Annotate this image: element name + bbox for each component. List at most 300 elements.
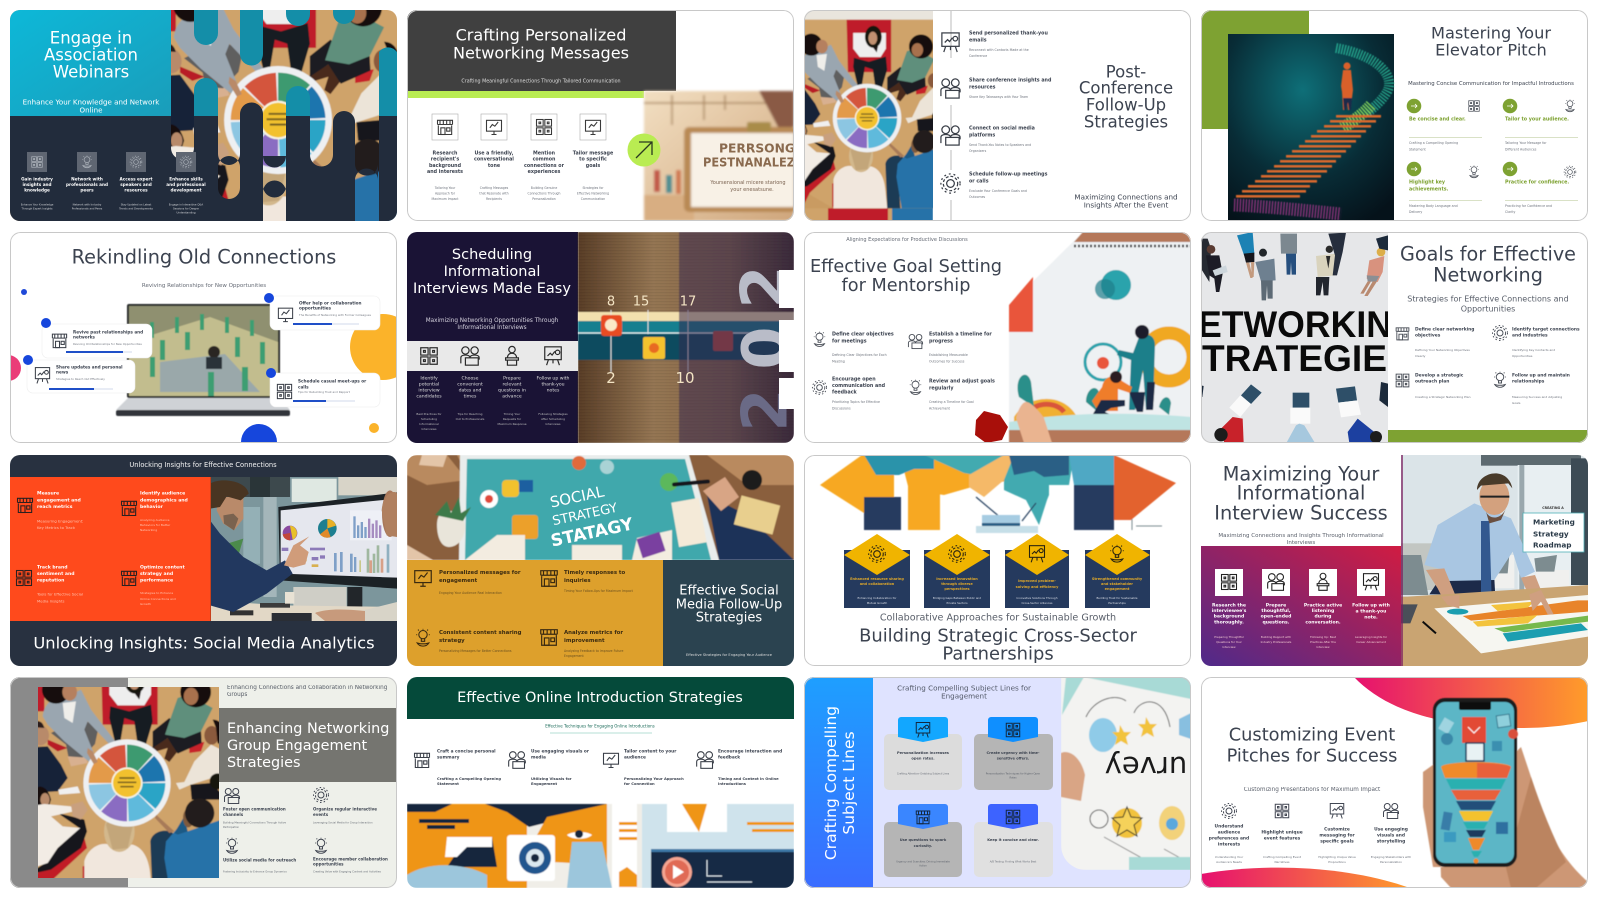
- item captions: Personalizing Your Approach: [624, 777, 684, 781]
- title: [676, 584, 782, 626]
- card: curiosity: Action: [919, 864, 927, 868]
- callout: offer: [264, 293, 380, 330]
- title: [859, 626, 1138, 664]
- timeline numbers: [606, 294, 696, 387]
- slide: Crafting Compelling Subject Lines: [804, 677, 1191, 888]
- callout: schedule: Schedule casual meet-ups or: [298, 378, 367, 384]
- chevron card 4: [1085, 534, 1150, 608]
- white edge blocks: [779, 270, 794, 409]
- item labels: during: [1315, 614, 1331, 620]
- amber panel: [407, 560, 663, 666]
- item labels: messaging for: [1319, 832, 1355, 838]
- item captions: Utilizing Visuals for: [531, 777, 572, 781]
- photo: analyst at monitor: [210, 477, 398, 621]
- title: Networking: [1433, 264, 1543, 286]
- item captions: Goals: [1512, 401, 1521, 405]
- item captions: Creating a Timeline for Goal: [929, 400, 974, 404]
- top caption: [227, 685, 388, 698]
- item labels: summary: [437, 754, 460, 760]
- item labels: Personalized messages for: [439, 570, 521, 576]
- slide: Crafting Personalized Networking Messages: your enesatsune.: [730, 187, 774, 193]
- title: Effective Online Introduction Strategies: [457, 690, 743, 706]
- item labels: advance: [502, 394, 522, 400]
- item captions: Approach for: [435, 192, 456, 196]
- item captions: Strategies for: [582, 186, 604, 190]
- chevron card 1: Enhancing Collaboration for: [858, 596, 897, 600]
- title: [1400, 242, 1576, 286]
- item labels: speakers and: [120, 182, 152, 187]
- title: Interview Success: [1214, 502, 1388, 524]
- item captions: Trends and Developments: [119, 206, 154, 210]
- item captions: [439, 589, 634, 658]
- item labels: Network with: [71, 176, 103, 182]
- item captions: Identifying Key Contacts and: [1512, 348, 1555, 352]
- item captions: [432, 186, 609, 201]
- subtitle: [426, 318, 559, 331]
- item labels: thoroughly.: [1214, 620, 1244, 626]
- item labels: Establish a timeline for: [929, 332, 992, 338]
- photo: desk sign: [644, 91, 796, 221]
- top caption: Groups: [227, 692, 247, 698]
- item labels: reputation: [37, 578, 64, 584]
- item captions: Understanding Your: [1215, 855, 1244, 859]
- item captions: Career Advancement: [1356, 640, 1387, 644]
- subtitle: Insights After the Event: [1084, 200, 1168, 210]
- item labels: interviewee's: [1212, 608, 1247, 614]
- item captions: Interview: [1316, 645, 1330, 649]
- item captions: Engaging Your Audience Real Interaction: [439, 591, 502, 595]
- photo: social strategy tablet on desk: [407, 455, 794, 560]
- item labels: feedback: [718, 754, 740, 760]
- item labels: Gain industry: [21, 176, 53, 182]
- icons: [16, 498, 136, 586]
- grey side band: [10, 677, 128, 888]
- item captions: Online Connections and: [140, 597, 176, 601]
- item icons: [415, 571, 557, 646]
- item captions: Building Rapport with: [1261, 635, 1291, 639]
- title: Maximizing Your: [1223, 462, 1379, 486]
- item labels: development: [171, 188, 201, 192]
- item captions: [21, 202, 203, 214]
- card: concise: [974, 804, 1053, 877]
- title: [453, 26, 629, 62]
- item captions: [1215, 855, 1411, 864]
- title: Effective Social: [679, 584, 779, 598]
- item captions: Narratives: [1275, 860, 1290, 864]
- item captions: Building Meaningful Connections Through Active: [223, 820, 286, 824]
- item labels: performance: [140, 578, 173, 584]
- title: Rekindling Old Connections: [72, 246, 336, 268]
- item captions: Growth: [140, 602, 151, 606]
- chevron card 3: [1005, 534, 1069, 608]
- item labels: [1415, 326, 1580, 384]
- item labels: interests: [1218, 842, 1240, 848]
- subtitle: Crafting Meaningful Connections Through Tailored Communication: [461, 78, 621, 84]
- item captions: Leveraging Insights for: [1355, 635, 1388, 639]
- chevron card 2: perspectives: [944, 587, 970, 591]
- item labels: communication and: [832, 383, 886, 389]
- gradient swoosh top: [1354, 677, 1588, 728]
- item labels: Prepare: [503, 376, 521, 382]
- card: curiosity: Use questions to spark: [900, 838, 947, 842]
- item labels: conversational: [474, 156, 514, 162]
- item captions: Best Practices for: [416, 412, 442, 416]
- timeline text: platforms: [969, 132, 995, 138]
- icon strip: [407, 341, 578, 371]
- item labels: professionals and: [66, 182, 108, 187]
- item labels: feedback: [832, 390, 858, 396]
- item labels: progress: [929, 338, 953, 344]
- item captions: Crafting Compelling Event: [1263, 855, 1302, 859]
- social strategy words: [548, 482, 636, 551]
- item labels: for meetings: [832, 338, 867, 344]
- timeline text: emails: [969, 38, 987, 44]
- item labels: outreach plan: [1415, 378, 1449, 384]
- item labels: Follow up with: [1352, 602, 1390, 608]
- title panel: Group Engagement: [227, 738, 368, 754]
- timeline captions: Conference: [969, 54, 987, 58]
- subtitle: Maximizing Connections and: [1074, 192, 1178, 202]
- item icons: [812, 332, 923, 395]
- item captions: Mastering Body Language and: [1409, 204, 1458, 208]
- chevron card 3: solving and efficiency: [1016, 585, 1059, 589]
- chevron card 2: [924, 534, 990, 608]
- chevron card 2: Increased innovation: [936, 577, 978, 581]
- item labels: inquiries: [564, 578, 591, 584]
- item captions: Timing Your Follow-Ups for Maximum Impact: [563, 589, 634, 593]
- item labels: Follow up with: [537, 376, 570, 382]
- photo: survey sheet: urvey: [1105, 750, 1187, 784]
- slide: Unlocking Insights Social Media Analytics: [10, 455, 397, 666]
- item captions: Maximum Response: [497, 422, 527, 426]
- item labels: opportunities: [313, 862, 344, 866]
- item captions: [416, 412, 568, 431]
- slide: Scheduling Informational Interviews Made Easy: [407, 232, 794, 443]
- item captions: Connections Through: [528, 192, 561, 196]
- timeline text: Connect on social media: [969, 126, 1035, 132]
- item captions: Measuring Engagement:: [37, 518, 83, 524]
- card: open rates: [884, 717, 962, 790]
- item labels: reach metrics: [37, 504, 73, 510]
- item captions: Enhance Your Knowledge: [21, 202, 54, 206]
- item labels: [1212, 602, 1390, 626]
- title: Follow-Up: [1086, 96, 1166, 114]
- chevron card 4: Partnerships: [1108, 601, 1126, 605]
- item labels: audience: [1218, 830, 1240, 836]
- callout: offer: opportunities: [299, 306, 331, 310]
- item labels: [223, 806, 388, 866]
- timeline captions: Outcomes: [969, 195, 986, 199]
- timeline numbers: 2: [606, 369, 616, 387]
- card: urgency: Personalization Techniques for Higher Open: [986, 772, 1041, 776]
- slide: Goals for Effective Networking: [1201, 232, 1588, 443]
- item captions: Introductions: [718, 782, 747, 786]
- item labels: Define clear networking: [1415, 326, 1474, 332]
- item labels: common: [533, 158, 556, 162]
- social strategy words: SOCIAL: [548, 482, 606, 512]
- item labels: interview: [418, 388, 440, 394]
- item captions: Practices After the: [1310, 640, 1336, 644]
- item captions: Prioritizing Topics for Effective: [832, 400, 880, 404]
- item captions: Participation: [223, 825, 240, 829]
- sign: marketing roadmap: CREATING A: [1542, 506, 1564, 510]
- subtitle: [897, 684, 1031, 700]
- item captions: Meeting: [832, 360, 845, 364]
- subtitle: Interviews: [1287, 540, 1315, 546]
- card: curiosity: [884, 804, 962, 877]
- item labels: Mention: [533, 150, 556, 156]
- item labels: to specific: [579, 156, 607, 162]
- item labels: Highlight unique: [1261, 830, 1303, 836]
- item captions: Personalizing Messages for Better Connections: [439, 649, 512, 653]
- item captions: Crafting a Compelling Opening: [1409, 141, 1458, 145]
- timeline numbers: 17: [680, 294, 696, 310]
- card: concise: A/B Testing: Finding What Works Best: [990, 860, 1036, 864]
- item labels: Timely responses to: [564, 570, 625, 576]
- title: Scheduling: [452, 247, 532, 263]
- chevron card 4: and stakeholder: [1101, 582, 1133, 586]
- green block: [1201, 10, 1309, 129]
- vertical title: [822, 706, 858, 860]
- navy text panel: [407, 232, 578, 443]
- title: Pitches for Success: [1227, 746, 1397, 766]
- item captions: Analyzing Feedback to Improve Future: [564, 649, 624, 653]
- item captions: Statement: [437, 782, 459, 786]
- slide: Effective Social Media Follow-Up Strategies: [407, 455, 794, 666]
- title: Mastering Your: [1431, 24, 1551, 42]
- timeline numbers: 8: [607, 294, 615, 310]
- item labels: Research the: [1212, 602, 1246, 608]
- subtitle: Crafting Compelling Subject Lines for: [897, 684, 1031, 692]
- item captions: Understanding: [176, 210, 196, 214]
- timeline captions: Organizers: [969, 149, 987, 153]
- item labels: thoughtful,: [1261, 608, 1291, 614]
- big words in photo: TRATEGIE: [1202, 338, 1387, 379]
- top caption: Enhancing Connections and Collaboration in Networking: [227, 685, 388, 691]
- item labels: Be concise and clear.: [1409, 116, 1466, 122]
- image: hand holding phone: [1423, 698, 1588, 888]
- item captions: Networking: [140, 528, 157, 532]
- timeline text: [969, 30, 1052, 184]
- item labels: preferences and: [1209, 836, 1249, 842]
- item labels: [437, 748, 782, 760]
- item captions: Defining Your Networking Objectives: [1415, 348, 1470, 352]
- item captions: Stay Updated on Latest: [121, 202, 151, 206]
- callout: schedule: calls: [298, 384, 309, 390]
- title: Engage in: [50, 28, 132, 48]
- card: urgency: [974, 717, 1053, 790]
- timeline icons: [941, 33, 960, 193]
- top caption: Aligning Expectations for Productive Discussions: [846, 237, 968, 243]
- icon tiles: [1215, 569, 1385, 596]
- subtitle: Reviving Relationships for New Opportunities: [142, 283, 266, 289]
- title: Strategies: [1084, 112, 1168, 132]
- item captions: Timing and Context in Online: [718, 777, 779, 781]
- item labels: specific goals: [1320, 838, 1354, 844]
- timeline text: resources: [969, 84, 996, 90]
- item icons: [1222, 804, 1398, 818]
- item labels: convenient: [457, 382, 483, 388]
- subtitle: [23, 98, 160, 114]
- sign: marketing roadmap: Roadmap: [1533, 540, 1572, 550]
- item captions: Interview: [1222, 645, 1236, 649]
- item labels: Encourage open: [832, 376, 876, 382]
- title: Strategies: [696, 610, 762, 626]
- item captions: Strategies to Enhance: [140, 591, 173, 595]
- title: Goals for Effective: [1400, 242, 1576, 266]
- item labels: Tailor message: [573, 150, 614, 156]
- item captions: Different Audiences: [1505, 148, 1537, 152]
- item labels: [416, 376, 570, 400]
- gradient swoosh bottom: [1201, 868, 1410, 888]
- subtitle: Strategies for Effective Connections and: [1407, 294, 1569, 304]
- illustration: handshake arrows: [820, 455, 1176, 533]
- item labels: improvement: [564, 638, 605, 644]
- timeline captions: Reconnect with Contacts Made at the: [969, 48, 1029, 52]
- item captions: [437, 777, 779, 786]
- lime accent bar: [407, 91, 644, 98]
- orange panel: [10, 477, 210, 621]
- subtitle: Maximizing Connections and Insights Through Informational: [1218, 533, 1384, 539]
- item captions: Analyzing Audience: [140, 518, 170, 522]
- title: Crafting Personalized: [456, 26, 626, 44]
- item labels: Access expert: [120, 176, 152, 182]
- title: Association: [44, 46, 138, 64]
- chevron card 3: Innovative Solutions Through: [1017, 596, 1058, 600]
- item labels: Prepare: [1266, 602, 1286, 608]
- timeline image: [578, 232, 794, 443]
- item labels: listening: [1312, 608, 1334, 614]
- sign text: PERRSONG: [719, 140, 794, 156]
- item labels: Foster open communication: [223, 806, 286, 812]
- gradient panel: [1201, 546, 1401, 666]
- item labels: Highlight key: [1409, 180, 1446, 186]
- item labels: behavior: [140, 504, 163, 510]
- item captions: [36, 518, 176, 606]
- item labels: Encourage member collaboration: [313, 856, 388, 862]
- item labels: engagement and: [37, 498, 81, 504]
- item captions: Establishing Measurable: [929, 353, 968, 357]
- icon row: [27, 152, 196, 172]
- item labels: Utilize social media for outreach: [223, 858, 296, 862]
- item labels: resources: [124, 188, 148, 192]
- item captions: Building Genuine: [531, 186, 557, 190]
- item labels: dates and: [459, 388, 482, 394]
- item labels: strategy: [439, 638, 465, 644]
- timeline text: or calls: [969, 178, 989, 184]
- illustration: woman with camera and video screen: [407, 804, 794, 888]
- photo: group around wheel: [804, 10, 933, 221]
- item captions: Personalization: [1380, 860, 1402, 864]
- item labels: questions in: [498, 388, 526, 394]
- item labels: [439, 570, 625, 644]
- item captions: Clarity: [1505, 210, 1516, 214]
- item captions: Through Expert Insights: [21, 206, 53, 210]
- item labels: [832, 332, 995, 396]
- sign: marketing roadmap: Strategy: [1533, 530, 1569, 538]
- title: Partnerships: [942, 644, 1054, 664]
- title: for Mentorship: [842, 276, 970, 296]
- item captions: Effective Networking: [577, 192, 609, 196]
- card: open rates: open rates.: [911, 756, 935, 760]
- item captions: Requests for: [503, 417, 522, 421]
- large rotated year: [728, 265, 802, 432]
- item captions: Defining Clear Objectives for Each: [832, 353, 887, 357]
- title: Networking Messages: [453, 44, 629, 62]
- title: [1214, 462, 1388, 524]
- callout: revive: [41, 318, 152, 358]
- subtitle: Enhance Your Knowledge and Network: [23, 98, 160, 106]
- item labels: connections or: [524, 163, 565, 169]
- bottom title: Unlocking Insights: Social Media Analytics: [33, 634, 375, 652]
- slate title panel: [663, 560, 794, 666]
- dividers: [1409, 138, 1578, 200]
- callout: share: Share updates and personal: [56, 364, 123, 370]
- title: Webinars: [53, 62, 129, 82]
- subtitle: Informational Interviews: [457, 325, 527, 331]
- social strategy words: STATAGY: [549, 514, 636, 551]
- item labels: Identify: [420, 376, 438, 382]
- card: curiosity: curiosity.: [914, 844, 932, 848]
- blue side band: [804, 677, 873, 888]
- item labels: note.: [1364, 614, 1378, 620]
- item captions: Engaging Stakeholders with: [1371, 855, 1411, 859]
- item captions: Professionals and Peers: [72, 206, 103, 210]
- item labels: relationships: [1512, 378, 1545, 384]
- timeline captions: Send Thank-You Notes to Speakers and: [969, 143, 1031, 147]
- title: [1227, 724, 1397, 766]
- item captions: Creating Value with Engaging Content and Activities: [313, 870, 381, 874]
- item labels: Optimize content: [140, 564, 185, 570]
- chevron card 1: Mutual Growth: [867, 601, 888, 605]
- item captions: [1409, 141, 1552, 214]
- item labels: Review and adjust goals: [929, 378, 995, 384]
- item labels: Research: [433, 150, 458, 156]
- item labels: conversation.: [1305, 620, 1341, 626]
- item captions: Interviews: [546, 422, 561, 426]
- timeline captions: [969, 48, 1031, 199]
- photo: presenter at roadmap table: [1401, 455, 1588, 666]
- title: Building Strategic Cross-Sector: [859, 626, 1138, 646]
- item captions: Discussions: [832, 406, 851, 410]
- item labels: Define clear objectives: [832, 332, 894, 338]
- item labels: demographics and: [140, 498, 188, 504]
- image: glowing staircase: [1228, 34, 1394, 221]
- item labels: thank-you: [541, 382, 565, 388]
- item captions: Audience's Needs: [1216, 860, 1242, 864]
- timeline text: Schedule follow-up meetings: [969, 172, 1048, 178]
- sign text: [703, 140, 795, 170]
- card: concise: Keep it concise and clear.: [987, 838, 1039, 842]
- chevron card 1: Enhanced resource sharing: [850, 577, 904, 581]
- item labels: event features: [1264, 836, 1301, 842]
- item labels: events: [313, 812, 329, 817]
- title: [1431, 24, 1551, 60]
- item labels: background: [429, 163, 462, 169]
- item labels: channels: [223, 812, 244, 817]
- callout: revive: networks: [73, 334, 95, 340]
- item labels: insights and: [22, 182, 52, 187]
- subtitle: [1218, 533, 1384, 546]
- slide: Effective Online Introduction Strategies: [407, 677, 794, 888]
- item labels: relevant: [503, 382, 522, 388]
- timeline text: Send personalized thank-you: [969, 30, 1048, 36]
- item labels: knowledge: [24, 188, 50, 192]
- item captions: Leveraging Social Media for Group Interaction: [313, 820, 373, 824]
- item captions: Sessions for Deeper: [173, 206, 200, 210]
- item captions: Achievement: [929, 406, 951, 410]
- item captions: Practicing for Confidence and: [1505, 204, 1552, 208]
